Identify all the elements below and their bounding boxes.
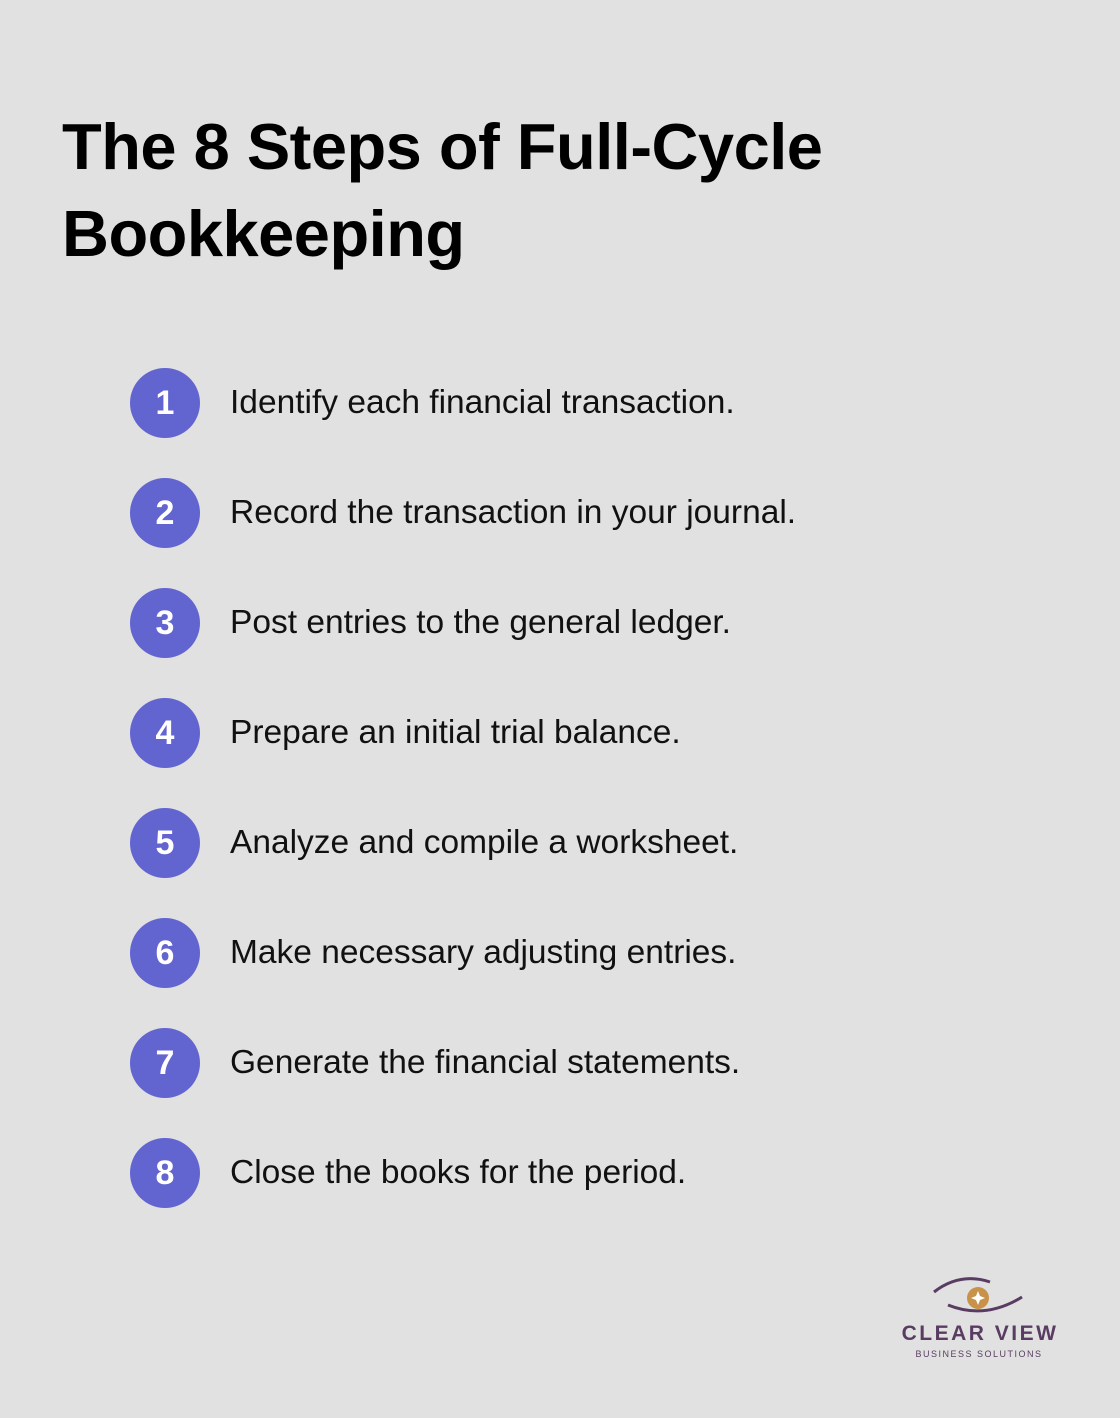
step 3: 3 [156, 604, 174, 642]
title: Bookkeeping [62, 197, 465, 270]
step 2 [130, 478, 796, 548]
step 8 [130, 1138, 686, 1208]
step 4 [130, 698, 681, 768]
step 1 [130, 368, 735, 438]
title: The 8 Steps of Full-Cycle [62, 110, 822, 183]
step 6 [130, 918, 736, 988]
step 3 [130, 588, 731, 658]
step 2: 2 [156, 494, 174, 532]
icon: eye [933, 1277, 1023, 1312]
step 7 [130, 1028, 740, 1098]
step 4: 4 [156, 714, 174, 752]
step 5: Analyze and compile a worksheet. [230, 824, 738, 861]
brand name: CLEAR VIEW [902, 1322, 1058, 1345]
step 8: 8 [156, 1154, 174, 1192]
step 5 [130, 808, 738, 878]
step 6: Make necessary adjusting entries. [230, 934, 736, 971]
step 7: Generate the financial statements. [230, 1044, 740, 1081]
step 2: Record the transaction in your journal. [230, 494, 796, 531]
logo [902, 1277, 1058, 1359]
step 5: 5 [156, 824, 174, 862]
tagline: BUSINESS SOLUTIONS [915, 1349, 1043, 1359]
step 8: Close the books for the period. [230, 1154, 686, 1191]
step 3: Post entries to the general ledger. [230, 604, 731, 641]
step 1: 1 [156, 384, 174, 422]
title [62, 110, 822, 270]
step 1: Identify each financial transaction. [230, 384, 735, 421]
step 4: Prepare an initial trial balance. [230, 714, 681, 751]
step 7: 7 [156, 1044, 174, 1082]
step 6: 6 [156, 934, 174, 972]
